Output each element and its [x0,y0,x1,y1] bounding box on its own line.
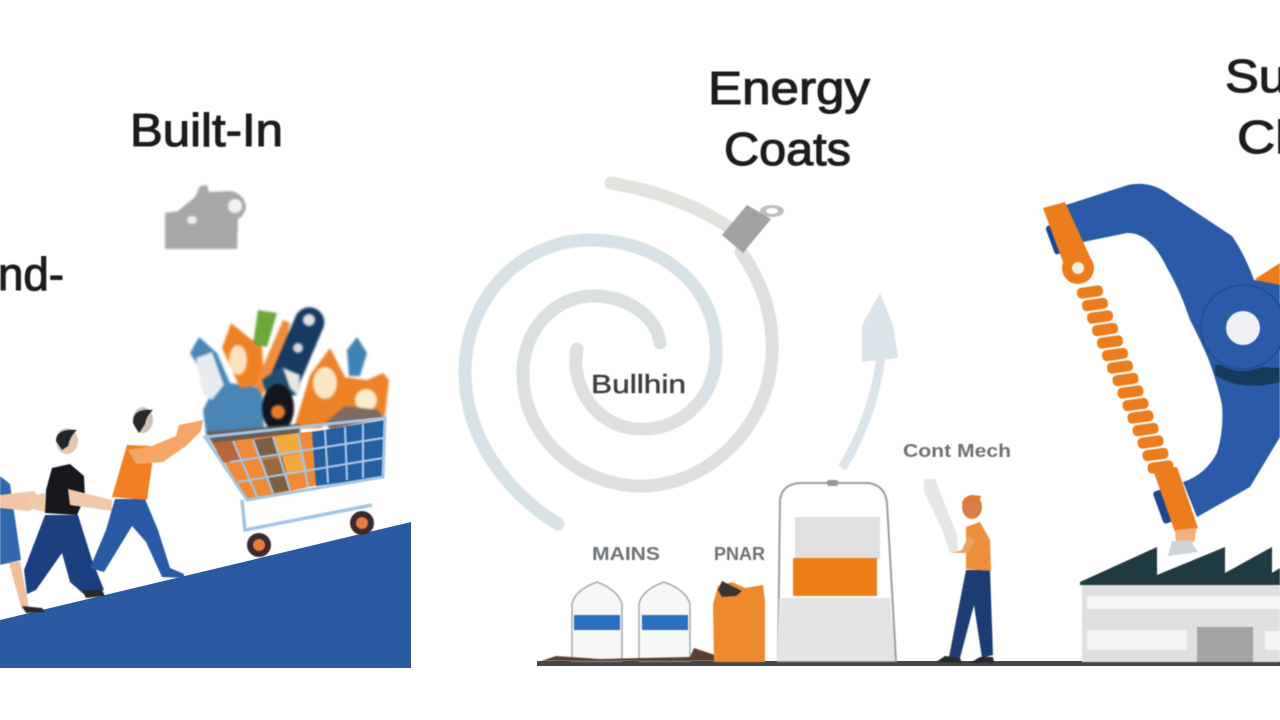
clamp pivot [1199,283,1280,386]
cart basket cell tints [213,433,307,493]
large tank [777,480,896,661]
worker arm [952,536,975,553]
worker trousers [949,570,993,658]
cart basket blue side [312,420,385,486]
clamp orange bar ends [1043,202,1198,532]
spiral arm inner end [523,296,660,378]
worker head [962,495,982,519]
person: man in orange shirt [90,407,203,578]
arrow rising from tank [842,293,898,468]
heading fragment: Cl: Cl [1237,111,1280,163]
tank lower fill [777,598,895,661]
clamp blue bar backing [1045,224,1173,524]
worker shoes [936,656,994,663]
person: woman in blue dress [0,476,45,613]
icon: spiral clip [722,205,784,253]
orange jug [713,581,765,662]
tank orange block [793,558,877,596]
factory door [1197,627,1253,662]
clamp orange teeth [1076,285,1174,474]
tank cap [827,480,838,486]
cart contents [190,303,389,448]
cart wire frame [205,418,385,530]
factory building [1080,547,1280,662]
clamp [1043,184,1280,556]
cart wheel front [350,511,374,535]
worker torso [966,522,991,571]
clamp foot [1168,528,1198,556]
heading: Built-In: Built-In [130,104,283,156]
cart basket orange side [213,430,328,500]
plan sheet [924,479,958,553]
worker reading plan [924,479,994,663]
spiral: outer grey arm [465,183,772,524]
heading: Energy: Energy [708,62,870,114]
people pushing cart [0,407,203,613]
person: man in black shirt [24,428,112,598]
bottle 1 [572,582,622,661]
label above bottles: MAINS [592,544,660,564]
spiral arm from centre [576,349,706,429]
spiral arm running to centre [523,252,772,486]
ground line [537,661,1280,666]
label above worker: Cont Mech [903,441,1011,461]
tank grey block [795,517,880,559]
ramp [0,522,411,668]
cart wheel rear [247,533,271,557]
bottles and tank [541,480,896,662]
factory roof [1080,547,1280,585]
label above jug: PNAR [714,544,765,564]
spiral blue-grey arm [465,240,716,524]
clamp blue body [1066,184,1280,517]
clamp orange wedge [1255,263,1280,295]
heading fragment: Su: Su [1225,50,1280,102]
heading: Coats: Coats [724,123,851,175]
debris at bottle base [541,648,716,661]
spiral centre label: Bullhin [591,369,686,399]
shopping cart [190,303,389,557]
icon: grey machine block [165,185,246,249]
bottle 2 [639,582,690,661]
